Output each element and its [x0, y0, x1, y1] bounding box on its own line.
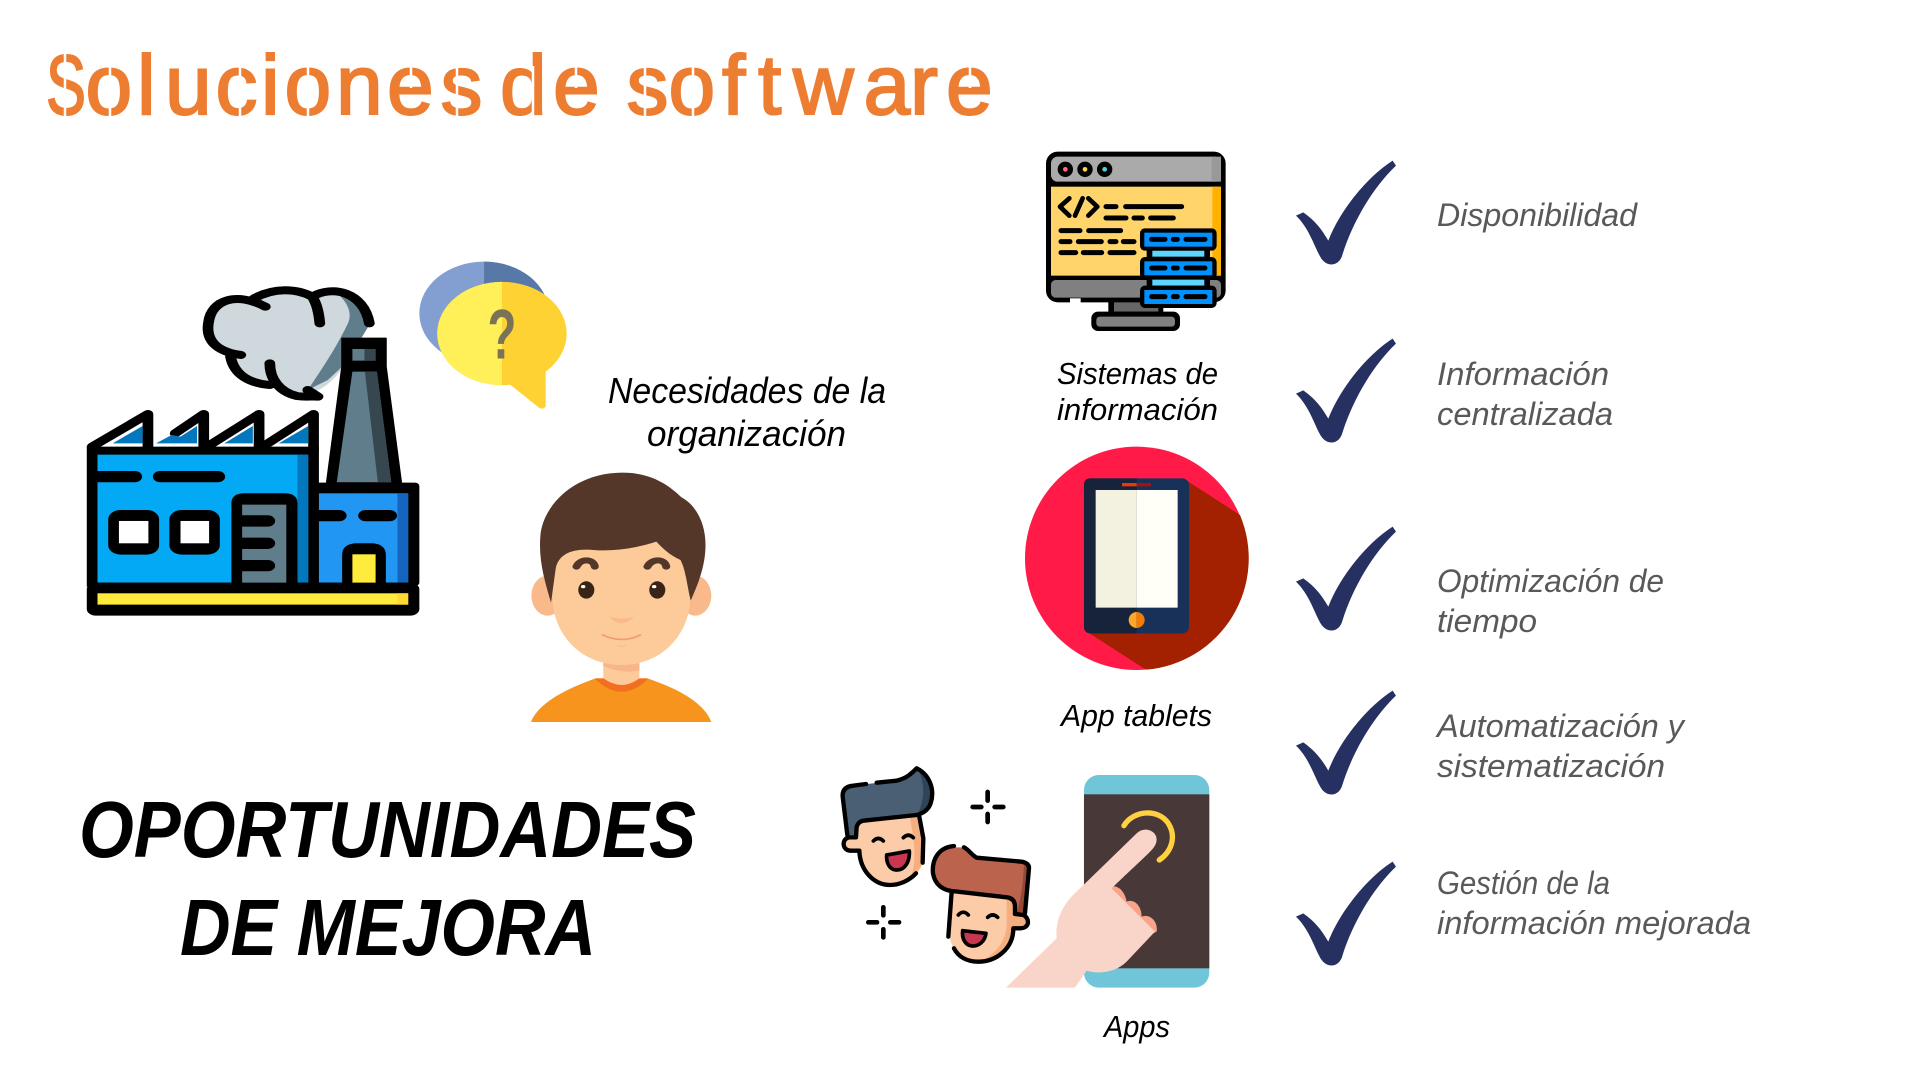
- benefit: informacion centralizada: [1296, 339, 1613, 442]
- annex building: [314, 483, 419, 586]
- icon: factory: [87, 290, 419, 616]
- benefit: automatizacion y sistematizacion: sistematización: [1437, 748, 1665, 784]
- icon: finger touching phone: [1006, 775, 1209, 988]
- heading: oportunidades de mejora: OPORTUNIDADES: [79, 785, 696, 874]
- label: sistemas de informacion: información: [1057, 392, 1218, 427]
- right head: [933, 846, 1029, 962]
- benefit: optimizacion de tiempo: [1296, 527, 1664, 639]
- shirt: [531, 678, 711, 722]
- ears: [531, 576, 564, 616]
- benefit: gestion de la informacion mejorada: [1296, 862, 1751, 965]
- label: necesidades: organización: [647, 413, 846, 454]
- server stack: [1140, 228, 1217, 308]
- label: sistemas de informacion: Sistemas de: [1057, 356, 1218, 391]
- benefit: gestion de la informacion mejorada: información mejorada: [1437, 905, 1751, 941]
- label: sistemas de informacion: [1057, 356, 1218, 427]
- base strip: [87, 583, 419, 616]
- label: necesidades: [608, 370, 886, 454]
- benefit: automatizacion y sistematizacion: [1296, 691, 1686, 794]
- benefit: optimizacion de tiempo: Optimización de: [1437, 563, 1664, 599]
- heading: oportunidades de mejora: DE MEJORA: [180, 883, 596, 972]
- icon: person: [531, 473, 711, 722]
- chimney: [327, 338, 401, 485]
- benefit: informacion centralizada: centralizada: [1437, 396, 1613, 432]
- smoke cloud: [208, 290, 369, 397]
- label: app tablets: App tablets: [1059, 698, 1212, 733]
- label: apps: Apps: [1102, 1009, 1170, 1044]
- benefit: disponibilidad: [1296, 161, 1638, 264]
- icon: question speech bubbles: [419, 262, 567, 409]
- benefit: gestion de la informacion mejorada: Gestión de la: [1437, 865, 1610, 901]
- benefit: optimizacion de tiempo: tiempo: [1437, 603, 1537, 639]
- nose and mouth: [609, 617, 634, 623]
- neck: [603, 658, 639, 685]
- hair: [540, 473, 706, 603]
- eyes: [578, 581, 594, 599]
- title: oluciones de software: [86, 38, 993, 132]
- icon: information system monitor: [1046, 152, 1226, 331]
- label: necesidades: Necesidades de la: [608, 370, 886, 411]
- face: [552, 530, 690, 665]
- main building: [87, 447, 319, 587]
- left head: [843, 768, 932, 885]
- benefit: disponibilidad: Disponibilidad: [1437, 197, 1638, 233]
- brows: [576, 560, 666, 567]
- roof sawteeth: [92, 414, 314, 450]
- benefit: automatizacion y sistematizacion: Automatización y: [1435, 708, 1686, 744]
- icon: tablet: [1025, 447, 1249, 670]
- icon: happy faces: [843, 768, 1029, 962]
- benefit: informacion centralizada: Información: [1437, 356, 1609, 392]
- heading: oportunidades de mejora: [79, 785, 696, 972]
- sparkles: [868, 792, 1003, 937]
- icon: question speech bubbles: ?: [487, 295, 516, 374]
- title: S: [46, 38, 86, 132]
